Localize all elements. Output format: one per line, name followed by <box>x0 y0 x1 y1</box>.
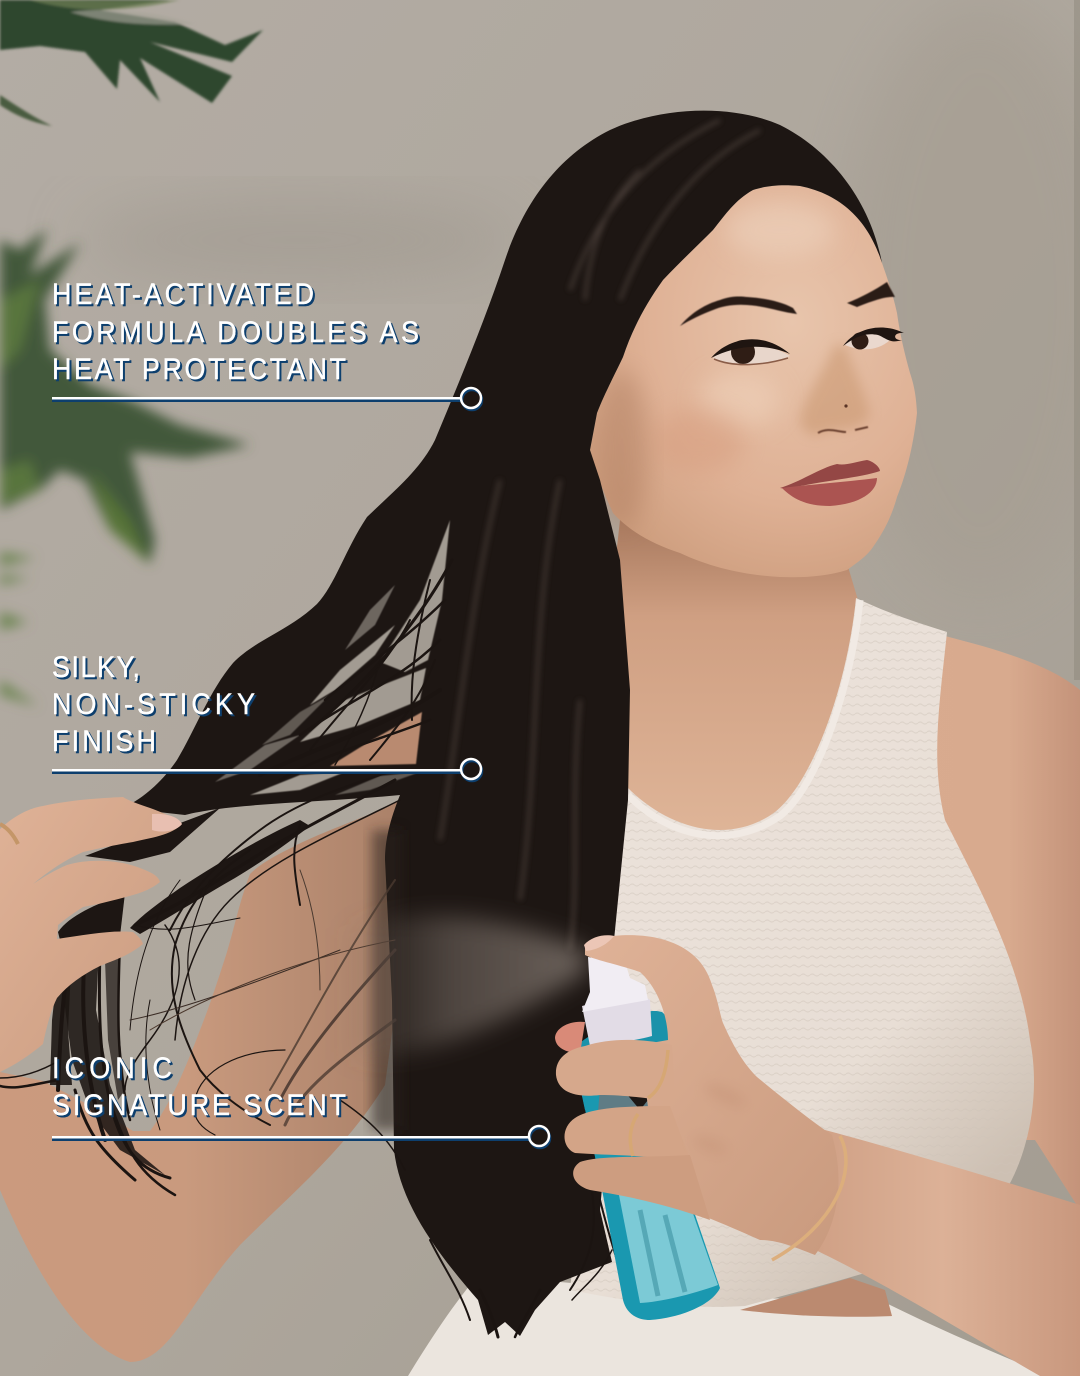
model's left arm and shoulder <box>0 795 410 1362</box>
fingernails <box>152 814 182 832</box>
white knit top <box>570 598 1034 1307</box>
callout: signature scent <box>52 1051 550 1148</box>
middle finger <box>556 1040 675 1102</box>
lips <box>780 460 880 506</box>
ring on left hand <box>0 824 18 844</box>
right eyebrow <box>847 282 895 307</box>
spray bottle <box>572 957 720 1320</box>
callout leader line <box>52 1126 550 1148</box>
midriff <box>740 1278 892 1317</box>
spray mist <box>340 916 586 1060</box>
rings <box>630 1050 668 1156</box>
model's right forearm <box>805 1130 1080 1376</box>
soft hair edge over shoulder <box>372 830 402 1130</box>
callout heading <box>52 650 255 757</box>
callout: heat-activated formula <box>52 277 482 410</box>
callout leader line <box>52 388 482 410</box>
plant: upper leaves <box>0 0 263 126</box>
nose <box>800 345 870 435</box>
callout heading: ICONIC <box>52 1051 172 1084</box>
ring finger <box>564 1106 690 1160</box>
callout: silky finish <box>52 650 482 781</box>
back of hand and index finger <box>585 935 838 1255</box>
model's right shoulder and arm <box>900 636 1080 1210</box>
callout heading <box>52 277 419 385</box>
neck and chest <box>600 520 870 840</box>
thumb tip <box>555 1022 585 1054</box>
bottle cap <box>582 992 652 1046</box>
knuckle shading <box>691 1078 748 1158</box>
head: face <box>590 185 917 577</box>
gaps showing wall between strands <box>215 520 450 795</box>
face shading <box>596 202 870 530</box>
bottle body <box>582 1090 720 1320</box>
callout heading: SILKY, <box>52 650 140 683</box>
hand holding bottle <box>555 935 838 1255</box>
hair shine <box>440 120 760 950</box>
bottle shoulder <box>572 1011 674 1110</box>
fingernail <box>584 935 614 951</box>
left eye <box>711 339 790 365</box>
callout heading: SIGNATURE SCENT <box>52 1088 346 1121</box>
callout heading: HEAT-ACTIVATED <box>52 277 314 310</box>
callout heading: FORMULA DOUBLES AS <box>52 315 419 348</box>
right eye <box>843 327 904 350</box>
model's fingers on hair <box>0 797 182 1072</box>
callout heading: FINISH <box>52 724 156 757</box>
callout heading: HEAT PROTECTANT <box>52 352 346 385</box>
hair: main mass <box>123 111 882 1336</box>
callout leader line <box>52 759 482 781</box>
gold bracelet <box>772 1136 846 1260</box>
callout heading: NON-STICKY <box>52 687 255 720</box>
callout heading <box>52 1051 346 1121</box>
plant: lower leaves <box>0 229 250 706</box>
skin showing between strands <box>330 712 422 766</box>
loose hair bundles <box>50 808 310 1175</box>
pump nozzle <box>582 957 648 1012</box>
left eyebrow <box>680 296 797 326</box>
little finger <box>573 1155 710 1220</box>
hair strands <box>0 560 630 1337</box>
white pants <box>408 1282 1050 1376</box>
